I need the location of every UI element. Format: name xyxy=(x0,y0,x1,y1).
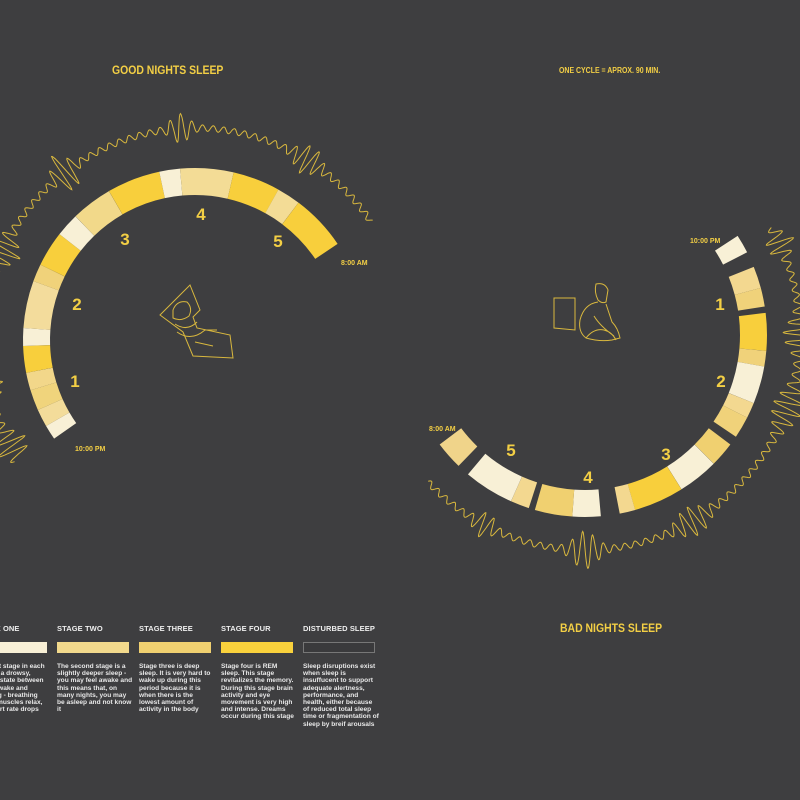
labels: cycle numbers bad night: 5 xyxy=(506,441,516,460)
labels: cycle numbers good night: 4 xyxy=(196,205,206,224)
chart: good night ring xyxy=(0,114,419,564)
legend: disturbed sleep: DISTURBED SLEEP xyxy=(303,624,375,633)
labels: cycle numbers good night: 5 xyxy=(273,232,283,251)
labels: cycle numbers bad night: 2 xyxy=(716,372,726,391)
legend: stage three: Stage three is deep sleep. It is very hard to wake up during this period because it is when there is the lowest amount of activity in the body xyxy=(139,663,210,713)
legend: stage three xyxy=(139,624,211,713)
brain wave: bad night xyxy=(428,228,800,568)
icon: sitting person xyxy=(554,284,620,341)
ring segments: good night xyxy=(0,116,419,564)
legend: stage four: STAGE FOUR xyxy=(221,624,271,633)
label: time start/end bad: 8:00 AM xyxy=(429,426,456,433)
legend: stage two: STAGE TWO xyxy=(57,624,103,633)
labels: cycle numbers good night xyxy=(70,205,283,391)
legend: stage two xyxy=(57,624,132,713)
label: time start/end bad: 10:00 PM xyxy=(690,238,721,245)
brain wave: good night xyxy=(0,114,373,462)
chart: bad night ring xyxy=(347,97,800,573)
labels: cycle numbers bad night: 3 xyxy=(661,445,671,464)
legend: disturbed sleep: Sleep disruptions exist when sleep is insuffucent to support adequate alertness, performance, and health, either because of reduced total sleep time or fragmentation of sleep by breif arousals xyxy=(303,663,379,728)
labels: cycle numbers bad night: 1 xyxy=(715,295,725,314)
label: time start/end good xyxy=(75,260,368,453)
labels: cycle numbers good night: 2 xyxy=(72,295,82,314)
title: one cycle note: ONE CYCLE = APROX. 90 MIN. xyxy=(559,66,660,75)
label: time start/end good: 8:00 AM xyxy=(341,260,368,267)
legend: stage three: STAGE THREE xyxy=(139,624,193,633)
ring segments: bad night xyxy=(347,97,800,573)
legend: disturbed sleep xyxy=(303,624,379,728)
icon: sleeping person xyxy=(160,285,233,358)
title: bad nights sleep: BAD NIGHTS SLEEP xyxy=(560,621,662,635)
labels: cycle numbers bad night xyxy=(506,295,726,487)
label: time start/end bad xyxy=(429,238,721,433)
labels: cycle numbers good night: 1 xyxy=(70,372,80,391)
title: good nights sleep: GOOD NIGHTS SLEEP xyxy=(112,63,223,77)
legend: stage one xyxy=(0,624,47,713)
labels: cycle numbers bad night: 4 xyxy=(583,468,593,487)
legend: stage two: The second stage is a slightly deeper sleep - you may feel awake and this means that, on many nights, you may be asleep and not know it xyxy=(57,663,132,713)
label: time start/end good: 10:00 PM xyxy=(75,446,106,453)
labels: cycle numbers good night: 3 xyxy=(120,230,130,249)
legend: stage four xyxy=(221,624,294,720)
legend: stage four: Stage four is REM sleep. This stage revitalizes the memory. During this stage brain activity and eye movement is very high and intense. Dreams occur during this stage xyxy=(221,663,294,720)
